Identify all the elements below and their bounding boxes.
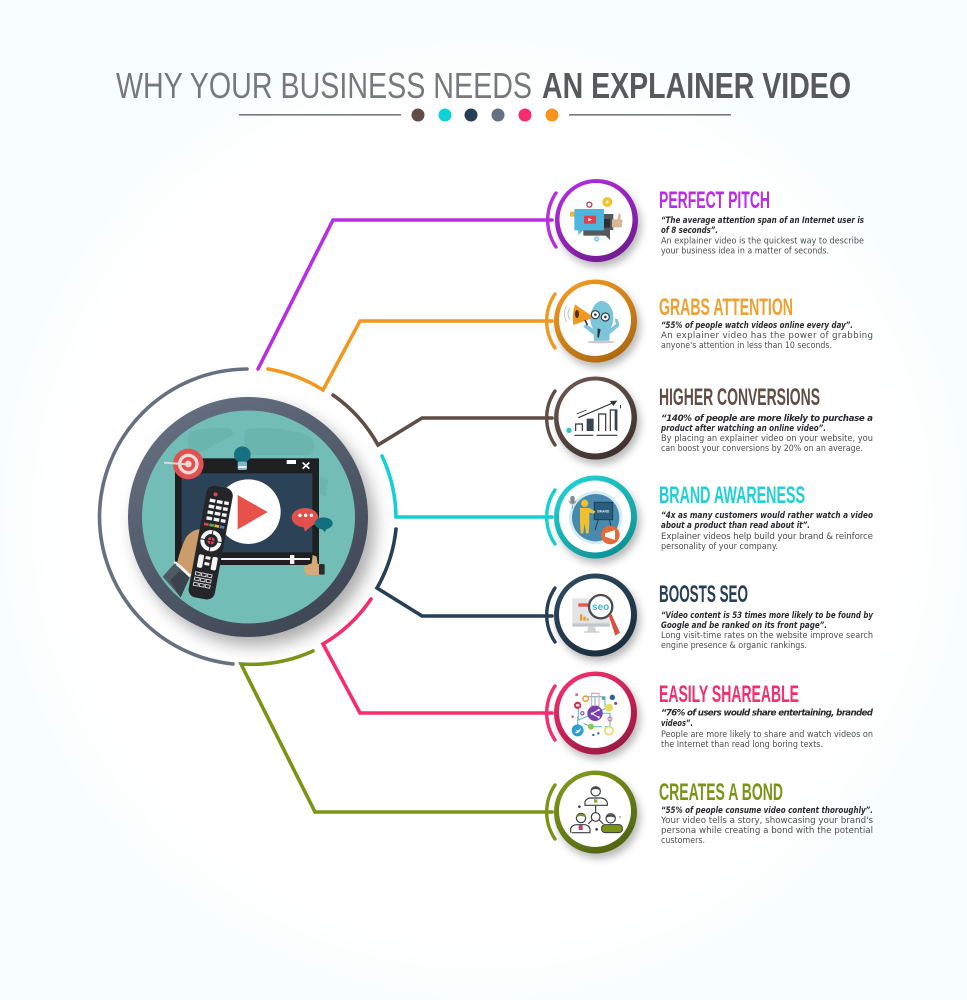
icon: growth chart [566, 401, 621, 435]
item: grabs attention [547, 280, 873, 362]
small arc [547, 391, 555, 445]
text block: about a product than read about it”. [661, 521, 810, 531]
text block [660, 806, 873, 846]
text block: anyone's attention in less than 10 seconds. [661, 341, 832, 351]
text block [661, 708, 874, 750]
heading: GRABS ATTENTION [659, 294, 793, 321]
item: creates a bond [547, 770, 873, 854]
connector: creates a bond [241, 651, 552, 812]
text block: personality of your company. [661, 542, 778, 552]
heading: CREATES A BOND [659, 779, 783, 806]
text block: “55% of people watch videos online every day”. [661, 321, 853, 331]
text block: “55% of people consume video content thoroughly”. [661, 806, 873, 816]
text block: An explainer video is the quickest way to describe [661, 236, 864, 246]
text block: Long visit-time rates on the website improve search [661, 631, 873, 641]
item: perfect pitch [548, 179, 864, 262]
text block [661, 321, 873, 351]
text block: product after watching an online video”. [660, 424, 826, 434]
item: easily shareable [547, 672, 874, 754]
text block [661, 216, 864, 256]
icon: mascot with megaphone [564, 301, 619, 343]
small arc [548, 193, 556, 247]
text block: the Internet than read long boring texts. [661, 740, 823, 750]
outer grey arc [100, 369, 247, 664]
central video illustration [128, 397, 368, 637]
small arc [547, 490, 555, 544]
remote control [187, 485, 234, 601]
world map shapes [187, 428, 328, 497]
thumb hand [304, 555, 320, 575]
heading: BRAND AWARENESS [659, 482, 805, 509]
connector: higher conversions [333, 395, 552, 445]
text block: “76% of users would share entertaining, branded [661, 708, 874, 718]
connector: grabs attention [268, 321, 552, 390]
item: higher conversions [547, 376, 873, 460]
icon: presenter with brand board: BRAND [597, 510, 610, 514]
ring [554, 476, 637, 558]
text block: “4x as many customers would rather watch a video [661, 511, 873, 521]
hand [177, 529, 205, 574]
ring [554, 672, 637, 754]
heading: EASILY SHAREABLE [659, 681, 799, 708]
icon: social share network [571, 693, 617, 736]
connector: easily shareable [323, 599, 552, 713]
connector: perfect pitch [258, 220, 552, 369]
text block: People are more likely to share and watch videos on [661, 730, 873, 740]
ring [555, 179, 638, 262]
small arc [547, 785, 555, 839]
small arc [547, 686, 555, 740]
text block: Explainer videos help build your brand & reinforce [661, 532, 873, 542]
text block: An explainer video has the power of grabbing [661, 331, 873, 341]
icon: connected people [571, 786, 622, 833]
text block: can boost your conversions by 20% on an average. [661, 444, 863, 454]
title: WHY YOUR BUSINESS NEEDS [116, 65, 532, 106]
icon: monitor with magnifier: seo [592, 602, 609, 613]
text block: “The average attention span of an Internet user is [661, 216, 864, 226]
icon: video chat bubbles [570, 197, 623, 242]
text block: Google and be ranked on its front page”. [661, 621, 827, 631]
connector: brand awareness [382, 456, 552, 517]
target icon [173, 449, 204, 479]
icon: presenter with brand board [569, 491, 622, 544]
play button [216, 479, 281, 544]
text block: your business idea in a matter of seconds. [661, 246, 829, 256]
item: brand awareness [547, 476, 873, 558]
text block [661, 611, 873, 651]
text block: “Video content is 53 times more likely to be found by [661, 611, 873, 621]
text block: Your video tells a story, showcasing your brand's [660, 816, 873, 826]
heading: HIGHER CONVERSIONS [659, 384, 820, 411]
connector: boosts seo [377, 529, 552, 616]
text block: customers. [661, 836, 705, 846]
ring [554, 376, 637, 460]
text block: By placing an explainer video on your website, you [661, 434, 873, 444]
video player window [175, 458, 319, 565]
text block [660, 414, 873, 454]
ring [554, 574, 637, 656]
small arc [547, 588, 555, 642]
heading: BOOSTS SEO [659, 581, 748, 608]
light bulb [234, 446, 251, 463]
text block [661, 511, 873, 552]
heading: PERFECT PITCH [659, 187, 770, 214]
title divider with coloured dots [239, 108, 731, 122]
ring [554, 770, 637, 854]
text block: persona while creating a bond with the potential [661, 826, 873, 836]
text block: of 8 seconds”. [661, 226, 718, 236]
icon: monitor with magnifier [572, 595, 620, 636]
text block: engine presence & organic rankings. [661, 641, 807, 651]
ring [554, 280, 637, 362]
text block: videos”. [661, 719, 693, 729]
item: boosts seo [547, 574, 873, 656]
title: AN EXPLAINER VIDEO [542, 65, 851, 106]
text block: “140% of people are more likely to purchase a [661, 414, 873, 424]
small arc [547, 294, 555, 348]
speech bubbles [292, 508, 333, 532]
sleeve [163, 564, 190, 597]
